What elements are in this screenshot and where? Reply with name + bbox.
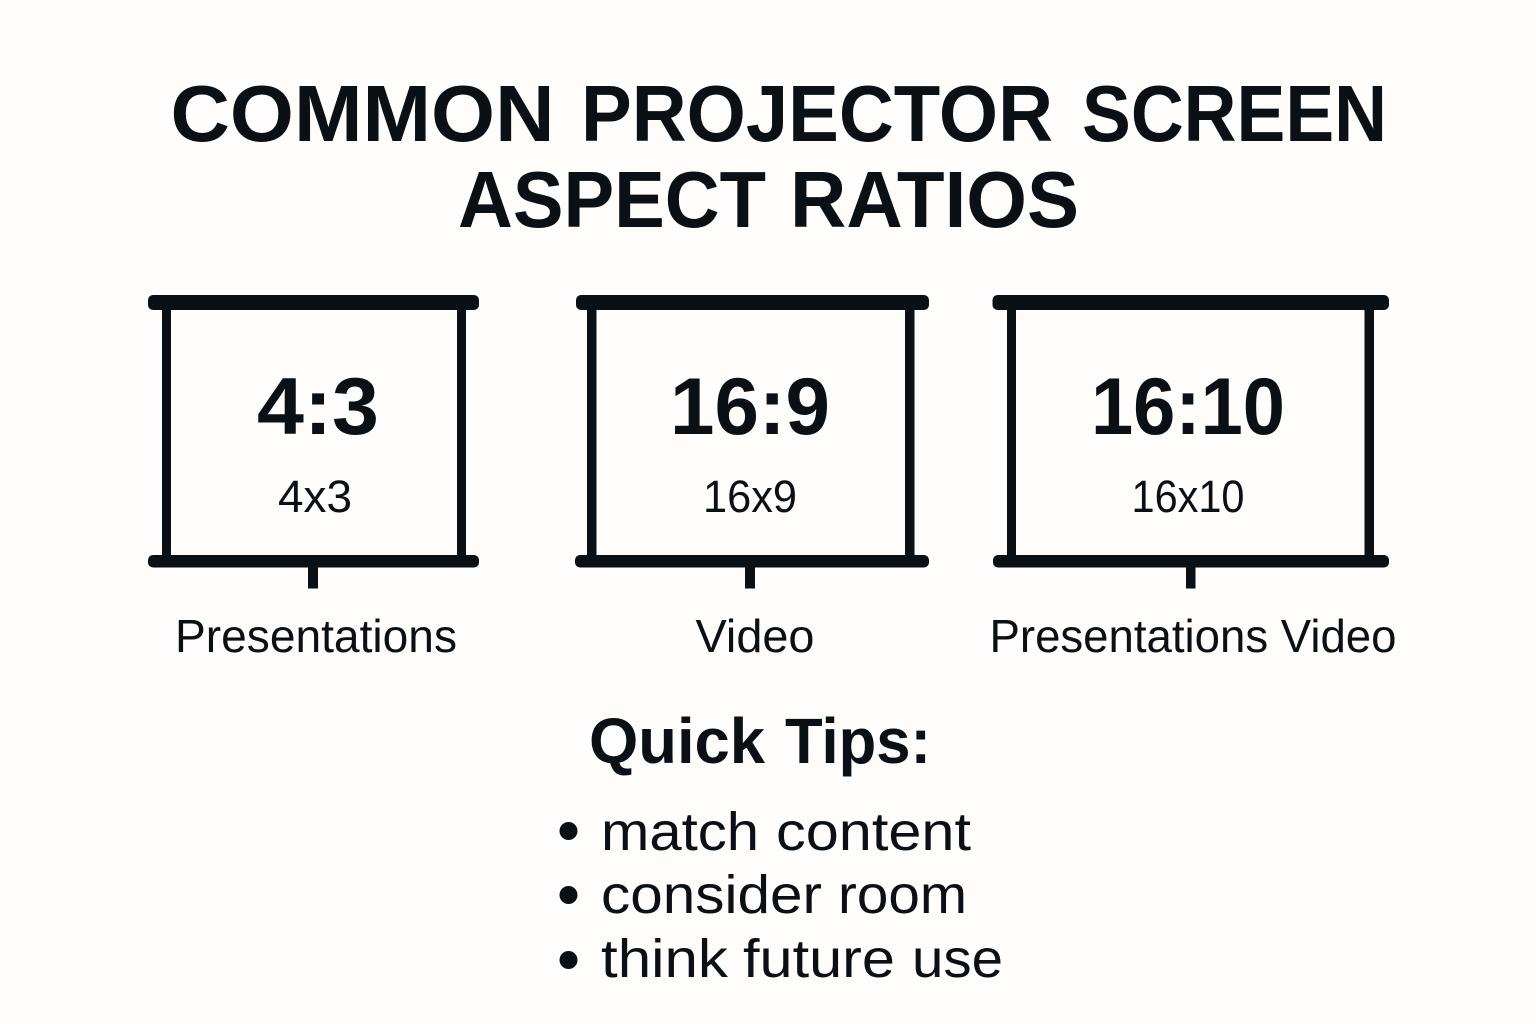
tip: think future use: use [912,929,1003,989]
tip: think future use [560,929,1003,989]
screen: 16:9: 16:9 [670,362,830,452]
screen: 16:9: 16x9 [703,471,797,522]
screen: 4:3: 4:3 [257,362,379,452]
title: PROJECTOR [581,69,1053,158]
tips list [560,802,1003,989]
label: video: Video [696,610,814,662]
heading: quick tips: Tips: [785,705,931,777]
screen: 4:3: 4x3 [278,471,352,522]
label: presentations video: Presentations Video [990,610,1396,662]
screen: 16:10: 16:10 [1091,362,1285,452]
title [170,69,1387,244]
tip: consider room: consider [601,865,822,925]
tip: match content: match [601,802,759,862]
title: ASPECT [458,155,766,244]
heading: quick tips: Quick [589,705,765,777]
label: presentations: Presentations [175,610,457,662]
title: COMMON [170,69,554,158]
title: SCREEN [1082,69,1387,158]
tip: match content: content [776,802,971,862]
screen: 16:10: 16x10 [1132,471,1244,522]
tip: think future use: think [601,929,729,989]
screen: 4:3 [148,295,479,588]
title: RATIOS [790,155,1079,244]
heading: quick tips [589,705,931,777]
tip: consider room [560,865,967,925]
tip: consider room: room [838,865,967,925]
tip: think future use: future [743,929,895,989]
screen: 16:10 [992,295,1389,588]
screen: 16:9 [575,295,929,588]
tip: match content [560,802,971,862]
